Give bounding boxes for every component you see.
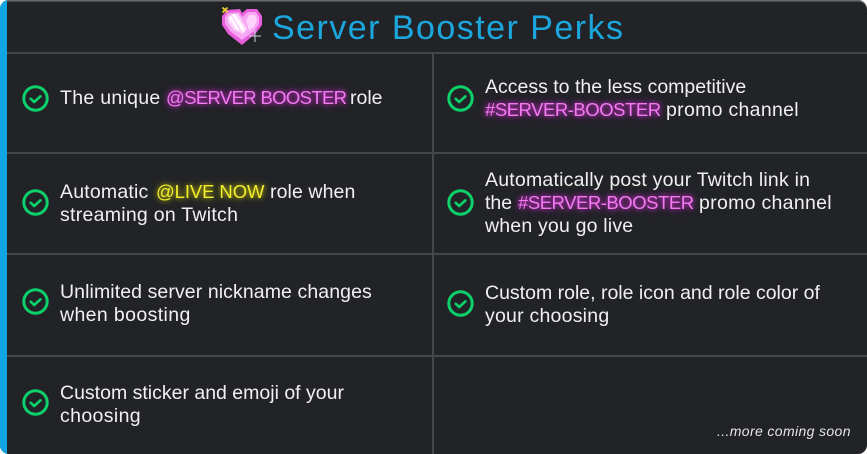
icon: check [447,85,474,112]
text: choosing [60,405,141,427]
text: Unlimited server nickname changes [60,281,372,303]
text [60,382,344,427]
perk: server booster role [22,85,383,112]
text [60,281,372,326]
text [485,282,820,327]
title: Server Booster Perks [272,9,623,47]
perk: live now role [22,180,355,226]
perk: auto post twitch link [447,169,832,237]
perk: custom sticker and emoji [22,382,344,427]
icon: check [447,290,474,317]
text [482,76,799,121]
text [60,180,355,226]
text: your choosing [485,305,609,327]
text: Automatically post your Twitch link in [485,169,810,191]
icon: check [447,189,474,216]
icon: check [22,189,49,216]
text: Custom sticker and emoji of your [60,382,344,404]
accent bar [0,0,7,454]
icon: check [22,85,49,112]
text: promo channel [699,192,832,214]
perk: nickname changes [22,281,372,326]
text: when boosting [60,304,191,326]
text: @LIVE NOW [156,181,264,202]
perk: custom role [447,282,820,327]
perk: promo channel access [447,76,799,121]
text: #SERVER-BOOSTER [485,99,661,120]
text: streaming on Twitch [60,204,238,226]
text: Access to the less competitive [485,76,746,98]
text: role [350,87,383,109]
icon: check [22,288,49,315]
text [485,169,832,237]
text: when you go live [485,215,633,237]
icon: check [22,389,49,416]
text [60,86,383,111]
text: Custom role, role icon and role color of [485,282,820,304]
icon: pixel heart [222,6,262,45]
text: The unique [60,87,161,109]
text: the [485,192,512,214]
text: #SERVER-BOOSTER [518,192,694,213]
text: role when [270,181,355,203]
text: Automatic [60,181,149,203]
note: more coming soon: ...more coming soon [717,423,851,439]
text: @SERVER BOOSTER [166,87,346,108]
text: promo channel [666,99,799,121]
